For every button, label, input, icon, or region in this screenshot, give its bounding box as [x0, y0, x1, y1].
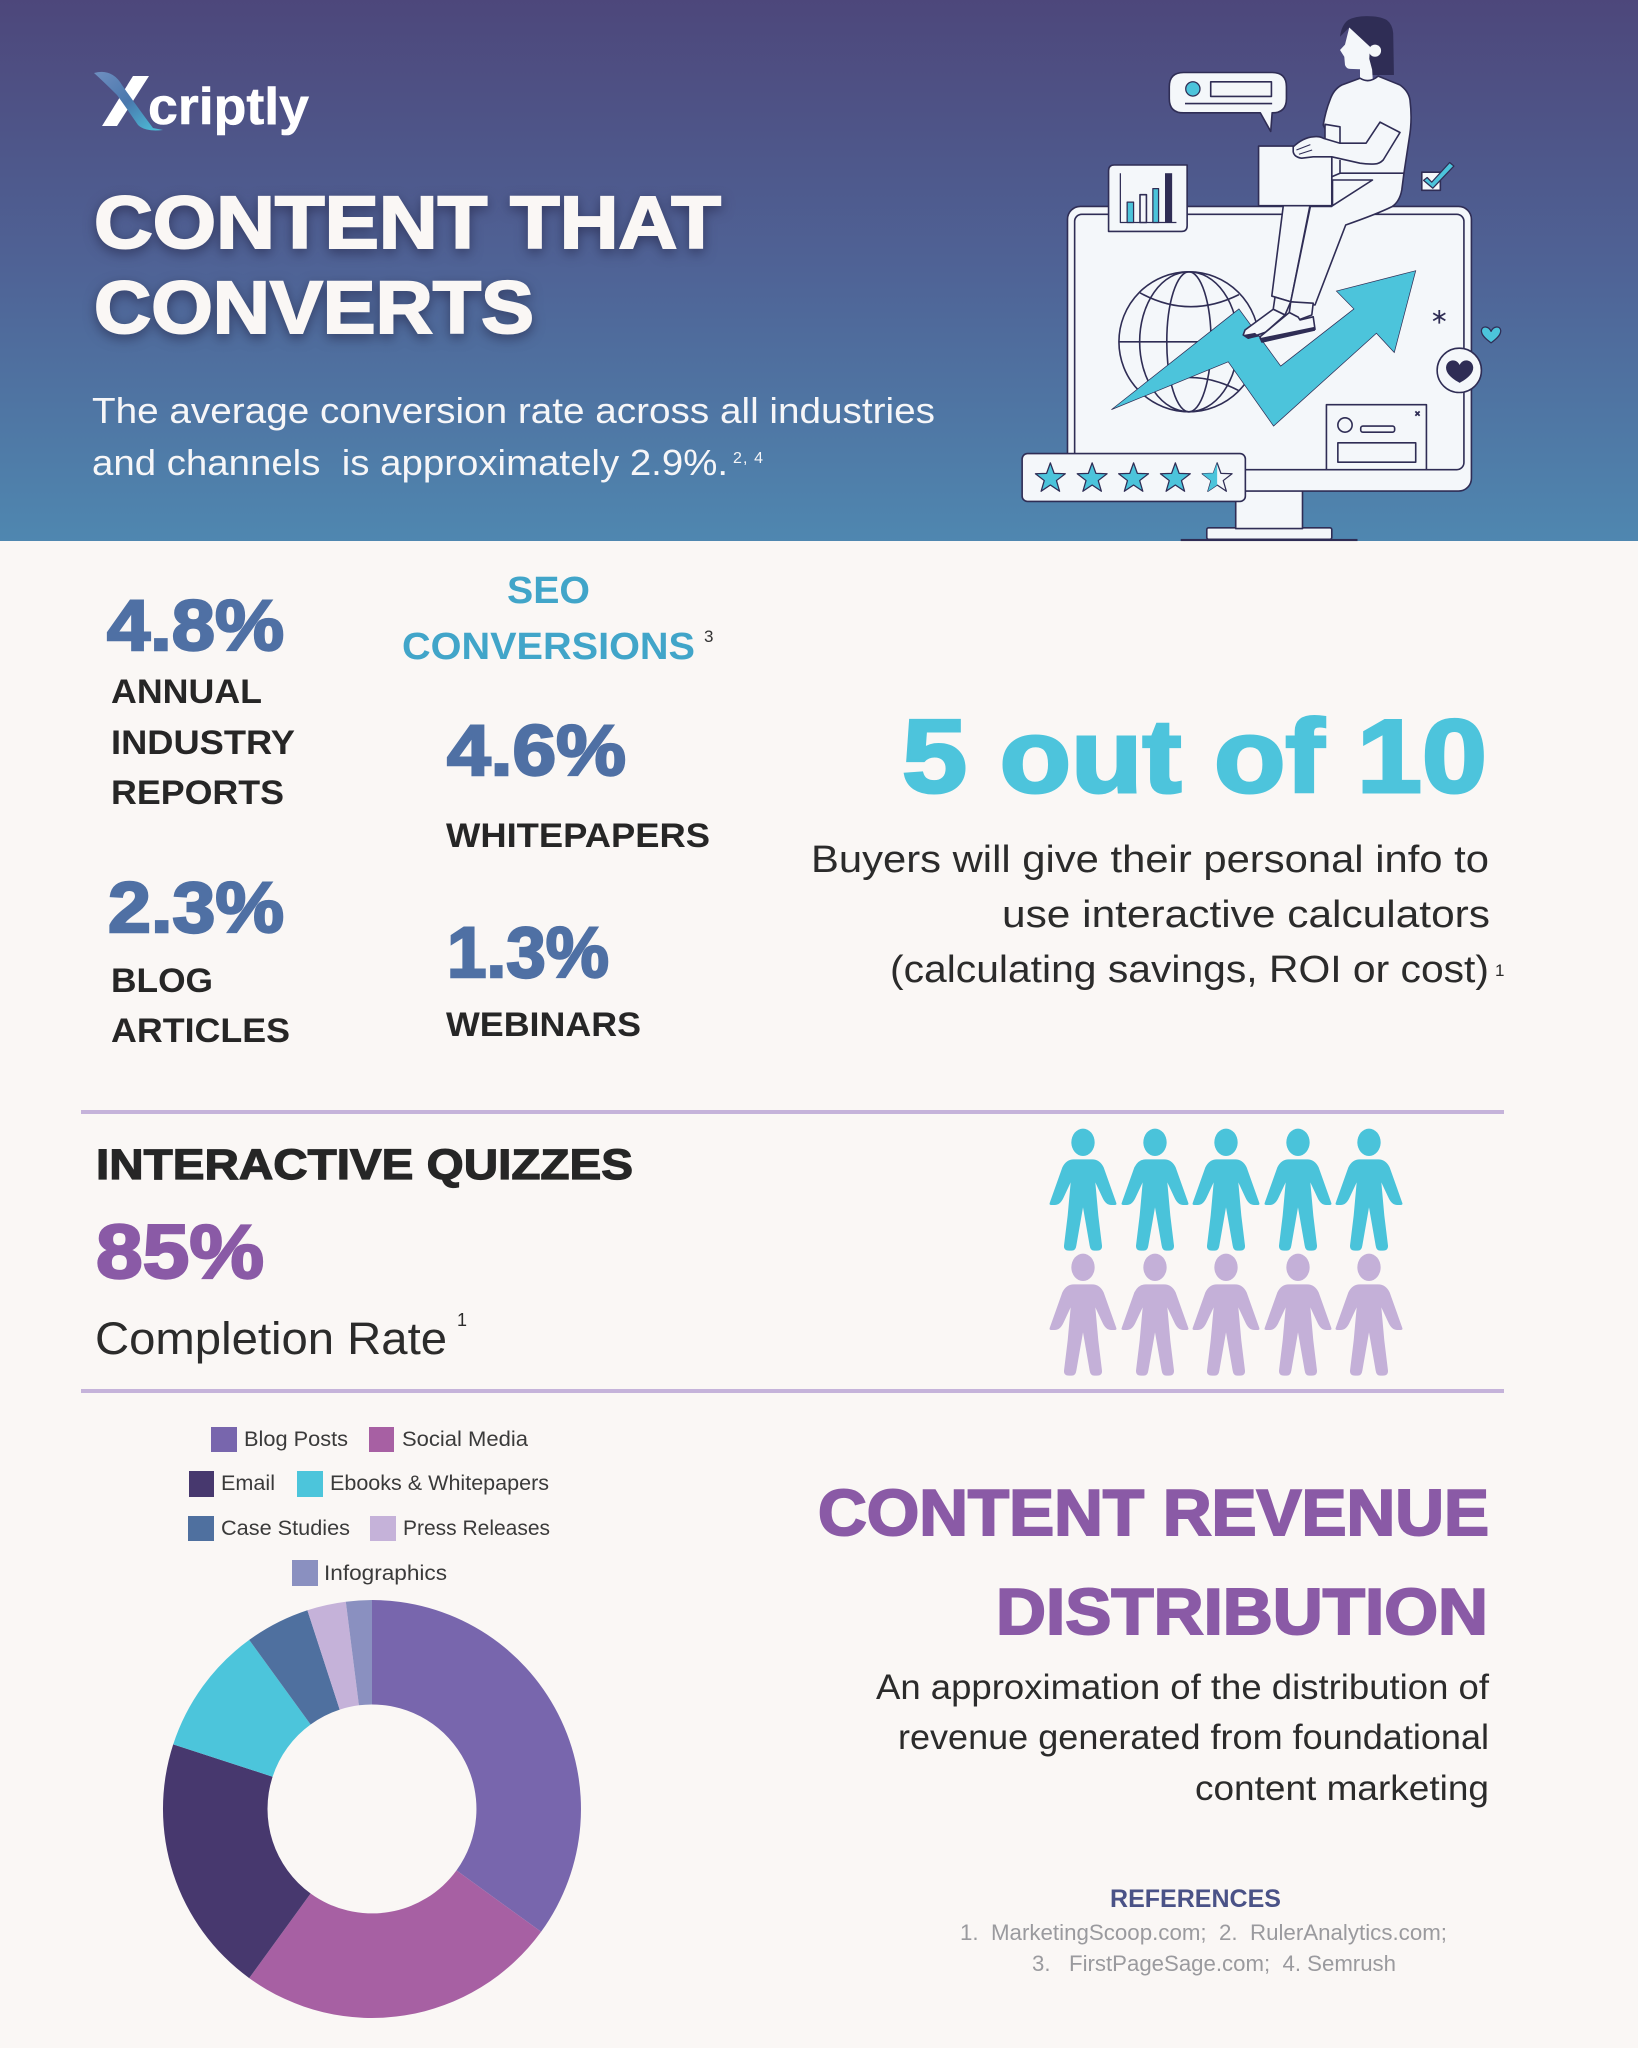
- stat: whitepapers: WHITEPAPERS: [446, 817, 710, 855]
- stat: whitepapers: 4.6%: [447, 712, 626, 791]
- stat: webinars: 1.3%: [447, 914, 609, 993]
- stat: webinars: [446, 914, 641, 1044]
- stat: annual industry reports: ANNUAL: [111, 673, 262, 711]
- chart legend: Infographics: [324, 1562, 447, 1585]
- references: REFERENCES: [1110, 1885, 1281, 1913]
- completion rate label: Completion Rate: [95, 1313, 447, 1364]
- stat: blog articles: ARTICLES: [111, 1012, 290, 1050]
- chart legend: Email: [221, 1472, 275, 1495]
- stat: annual industry reports: REPORTS: [111, 774, 284, 812]
- description text: content marketing: [1195, 1769, 1489, 1808]
- heading: SEO conversions: 3: [704, 627, 713, 646]
- asterisk: [1433, 310, 1445, 324]
- callout text: use interactive calculators: [1002, 894, 1490, 936]
- references: 1. MarketingScoop.com; 2. RulerAnalytics.com;: [960, 1920, 1447, 1945]
- logo: Xcriptly: [94, 72, 309, 136]
- callout: 5 out of 10: 5 out of 10: [902, 699, 1487, 815]
- small teal heart: [1481, 327, 1501, 343]
- icon: teal people row: [1050, 1129, 1402, 1251]
- stat: annual industry reports: 4.8%: [107, 587, 284, 666]
- description text: [876, 1668, 1489, 1808]
- heading: content revenue distribution: CONTENT REVENUE: [818, 1476, 1489, 1549]
- heading: SEO conversions: CONVERSIONS: [402, 626, 695, 668]
- heading: SEO conversions: SEO: [507, 570, 590, 612]
- chart legend: Ebooks & Whitepapers: [330, 1472, 549, 1495]
- title: CONTENT THAT: [94, 181, 721, 264]
- speech bubble: [1169, 72, 1286, 131]
- description text: An approximation of the distribution of: [876, 1668, 1489, 1707]
- globe: [1119, 272, 1259, 412]
- stat: 85%: 85%: [96, 1210, 264, 1295]
- subtitle: [92, 390, 935, 483]
- completion rate label: 1: [457, 1310, 467, 1330]
- heading: interactive quizzes: INTERACTIVE QUIZZES: [96, 1141, 633, 1189]
- chart legend: Case Studies: [221, 1517, 350, 1540]
- stat: blog articles: 2.3%: [108, 869, 284, 948]
- subtitle: The average conversion rate across all industries: [92, 390, 935, 431]
- callout text: Buyers will give their personal info to: [811, 839, 1489, 881]
- callout text: 1: [1495, 961, 1504, 980]
- stat: annual industry reports: INDUSTRY: [111, 724, 295, 762]
- subtitle: and channels is approximately 2.9%.: [92, 442, 728, 483]
- heart badge: [1437, 348, 1481, 392]
- bar chart card: [1109, 165, 1187, 231]
- references: 3. FirstPageSage.com; 4. Semrush: [1032, 1951, 1396, 1976]
- title: [94, 181, 721, 349]
- stat: whitepapers: [446, 712, 710, 855]
- notification popup: [1326, 405, 1426, 470]
- stat: annual industry reports: [107, 587, 295, 812]
- description text: revenue generated from foundational: [898, 1718, 1489, 1757]
- callout text: (calculating savings, ROI or cost): [890, 949, 1489, 991]
- chart legend: Blog Posts: [244, 1428, 348, 1451]
- header band: [0, 0, 1638, 541]
- icon: lilac people row: [1050, 1254, 1402, 1376]
- references: [960, 1885, 1447, 1976]
- person: [1243, 16, 1411, 343]
- growth arrow: [1111, 271, 1416, 426]
- stat: blog articles: BLOG: [111, 962, 213, 1000]
- stat: webinars: WEBINARS: [446, 1006, 641, 1044]
- star rating: [1022, 454, 1245, 501]
- subtitle: 2, 4: [733, 450, 763, 467]
- title: CONVERTS: [94, 266, 534, 349]
- donut chart: [163, 1600, 581, 2018]
- heading: content revenue distribution: [818, 1476, 1489, 1648]
- stat: blog articles: [108, 869, 290, 1050]
- callout text: [811, 839, 1504, 991]
- illustration: person on monitor: [1022, 16, 1501, 541]
- logo: Xcriptly: criptly: [148, 78, 309, 136]
- chart legend: Social Media: [402, 1428, 528, 1451]
- heading: content revenue distribution: DISTRIBUTION: [996, 1575, 1488, 1648]
- chart legend: [188, 1427, 550, 1586]
- checkbox: [1422, 162, 1454, 190]
- heading: SEO conversions: [402, 570, 713, 668]
- chart legend: Press Releases: [403, 1517, 550, 1540]
